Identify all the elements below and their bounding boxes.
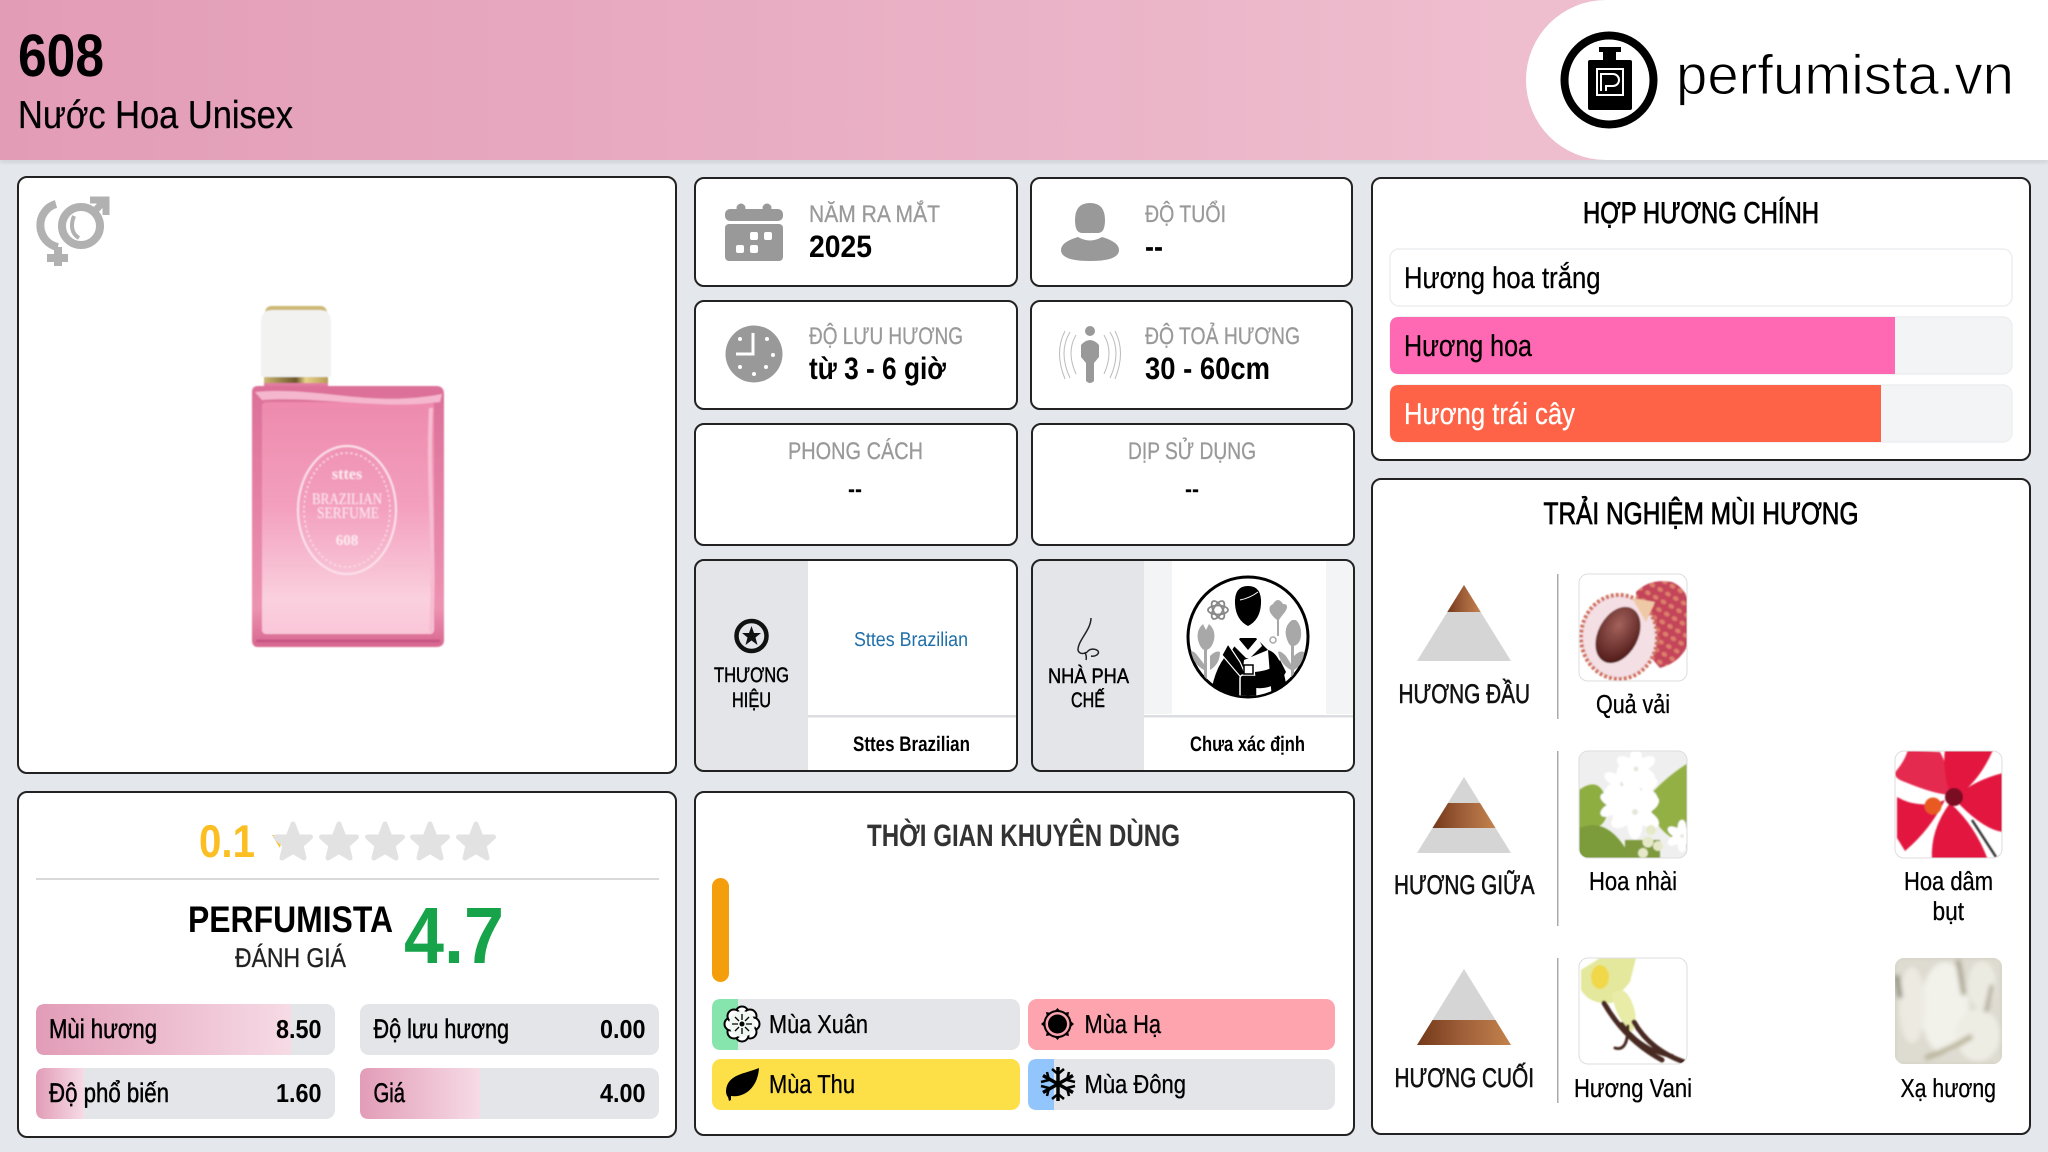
card: sillage: [1031, 301, 1352, 409]
base notes row: Hương Vani: [1574, 1073, 1692, 1103]
score bar: price: 4.00: [600, 1078, 646, 1108]
caption: hibiscus: [1904, 866, 1993, 926]
perfumista score: 4.7: [404, 891, 504, 980]
image: perfume bottle: BRAZILIAN: [312, 491, 382, 508]
card: perfumer: NHÀ PHA: [1048, 664, 1129, 688]
score bar: scent: 8.50: [276, 1014, 322, 1044]
panel: product image: [18, 177, 676, 773]
accord: white floral: Hương hoa trắng: [1404, 261, 1600, 295]
score bar: popularity: 1.60: [276, 1078, 322, 1108]
season: spring: [712, 999, 1020, 1050]
icon: pyramid top: [1417, 585, 1511, 661]
card: longevity: [695, 301, 1017, 409]
panel: recommended time: THỜI GIAN KHUYÊN DÙNG: [867, 818, 1180, 853]
image: perfume bottle: [252, 306, 444, 647]
image: vanilla: [1579, 958, 1687, 1064]
score bar: longevity: [360, 1004, 659, 1055]
card: sillage: ĐỘ TOẢ HƯƠNG: [1145, 322, 1300, 350]
panel: main accords: [1372, 178, 2030, 460]
image: hibiscus: [1895, 750, 2003, 860]
season: autumn: [712, 1059, 1020, 1110]
card: release year: NĂM RA MẮT: [809, 200, 940, 228]
accord: fruity: Hương trái cây: [1404, 398, 1575, 431]
base notes row: [1394, 958, 2002, 1103]
image: perfume bottle: 608: [336, 533, 358, 549]
panel: scent experience: TRẢI NGHIỆM MÙI HƯƠNG: [1544, 496, 1858, 531]
icon: unisex gender symbol: [40, 200, 106, 266]
card: perfumer: [1032, 560, 1354, 771]
image: perfume bottle: SERFUME: [317, 505, 379, 522]
card: brand: Sttes Brazilian: [853, 733, 970, 756]
panel: scent experience: [1372, 479, 2030, 1134]
panel: main accords: HỢP HƯƠNG CHÍNH: [1583, 196, 1819, 230]
subtitle: perfume type: Nước Hoa Unisex: [18, 94, 293, 137]
panel: recommended time: [695, 792, 1354, 1135]
day/night bar: [712, 878, 729, 982]
caption: hibiscus: Hoa dâm: [1904, 866, 1993, 896]
top notes row: HƯƠNG ĐẦU: [1398, 678, 1530, 709]
icon: star badge: [736, 621, 766, 651]
season: autumn: Mùa Thu: [769, 1069, 855, 1099]
image: musk: [1895, 958, 2002, 1064]
user rating with stars: [199, 815, 494, 867]
top notes row: [1398, 574, 1692, 719]
season: spring: Mùa Xuân: [769, 1009, 868, 1039]
title: product name: 608: [18, 22, 104, 89]
card: release year: [695, 178, 1017, 286]
middle notes row: HƯƠNG GIỮA: [1394, 870, 1534, 900]
image: perfume bottle: sttes: [332, 466, 362, 483]
card: release year: 2025: [809, 229, 872, 264]
icon: sun: [1041, 1008, 1074, 1040]
accord: floral: [1390, 317, 2012, 374]
score bar: popularity: Độ phổ biến: [49, 1078, 169, 1108]
icon: person with scent waves: [1060, 326, 1120, 383]
season: summer: [1028, 999, 1335, 1050]
card: occasion: DỊP SỬ DỤNG: [1128, 437, 1256, 465]
icon: snowflake: [1041, 1067, 1075, 1101]
icon: flower: [724, 1006, 760, 1042]
score bar: longevity: Độ lưu hương: [374, 1014, 509, 1044]
season: winter: [1028, 1059, 1335, 1110]
icon: leaf: [726, 1068, 759, 1101]
icon: pyramid middle: [1417, 777, 1511, 853]
card: occasion: --: [1185, 476, 1199, 503]
season: winter: Mùa Đông: [1084, 1069, 1186, 1099]
perfumista score: ĐÁNH GIÁ: [235, 943, 346, 973]
card: brand: THƯƠNG: [714, 664, 789, 687]
image: lychee: [1579, 574, 1692, 681]
score bar: price: Giá: [374, 1078, 406, 1108]
card: age: [1031, 178, 1352, 286]
card: age: --: [1145, 229, 1163, 264]
base notes row: HƯƠNG CUỐI: [1394, 1062, 1534, 1093]
card: brand: HIỆU: [732, 688, 771, 712]
icon: perfumer illustration: [1188, 577, 1308, 700]
card: sillage: 30 - 60cm: [1145, 351, 1270, 386]
card: occasion: [1032, 424, 1354, 545]
accord: white floral: [1390, 249, 2012, 306]
score bar: popularity: [36, 1068, 335, 1119]
card: brand: [695, 560, 1017, 771]
base notes row: Xạ hương: [1900, 1073, 1996, 1103]
score bar: longevity: 0.00: [600, 1014, 646, 1044]
icon: person: [1061, 203, 1119, 261]
icon: nose: [1078, 618, 1098, 660]
image: jasmine: [1578, 750, 1688, 858]
accord: fruity: [1390, 385, 2012, 442]
card: style: --: [848, 476, 862, 503]
card: longevity: ĐỘ LƯU HƯƠNG: [809, 322, 963, 350]
icon: calendar: [725, 204, 783, 261]
middle notes row: [1394, 747, 2003, 926]
icon: clock: [726, 326, 782, 382]
user rating with stars: 0.1: [199, 815, 255, 867]
score bar: price: [360, 1068, 659, 1119]
middle notes row: Hoa nhài: [1589, 866, 1677, 896]
caption: hibiscus: bụt: [1932, 896, 1965, 926]
perfumista score: [188, 891, 504, 980]
season: summer: Mùa Hạ: [1084, 1009, 1161, 1039]
accord: floral: Hương hoa: [1404, 330, 1532, 363]
perfumista score: PERFUMISTA: [188, 899, 393, 940]
panel: ratings: [18, 792, 676, 1137]
score bar: scent: [36, 1004, 335, 1055]
card: perfumer: CHẾ: [1071, 688, 1105, 712]
card: brand: Sttes Brazilian: [854, 629, 968, 651]
card: longevity: từ 3 - 6 giờ: [809, 351, 947, 386]
logo: perfumista.vn: [1526, 0, 2048, 160]
top notes row: Quả vải: [1596, 689, 1670, 719]
logo: perfumista.vn: perfumista.vn: [1676, 43, 2014, 106]
icon: pyramid base: [1417, 969, 1511, 1045]
card: style: PHONG CÁCH: [788, 438, 923, 465]
card: age: ĐỘ TUỔI: [1145, 200, 1226, 228]
card: style: [695, 424, 1017, 545]
score bar: scent: Mùi hương: [49, 1014, 157, 1044]
card: perfumer: Chưa xác định: [1190, 733, 1305, 756]
header banner: [0, 0, 2048, 163]
